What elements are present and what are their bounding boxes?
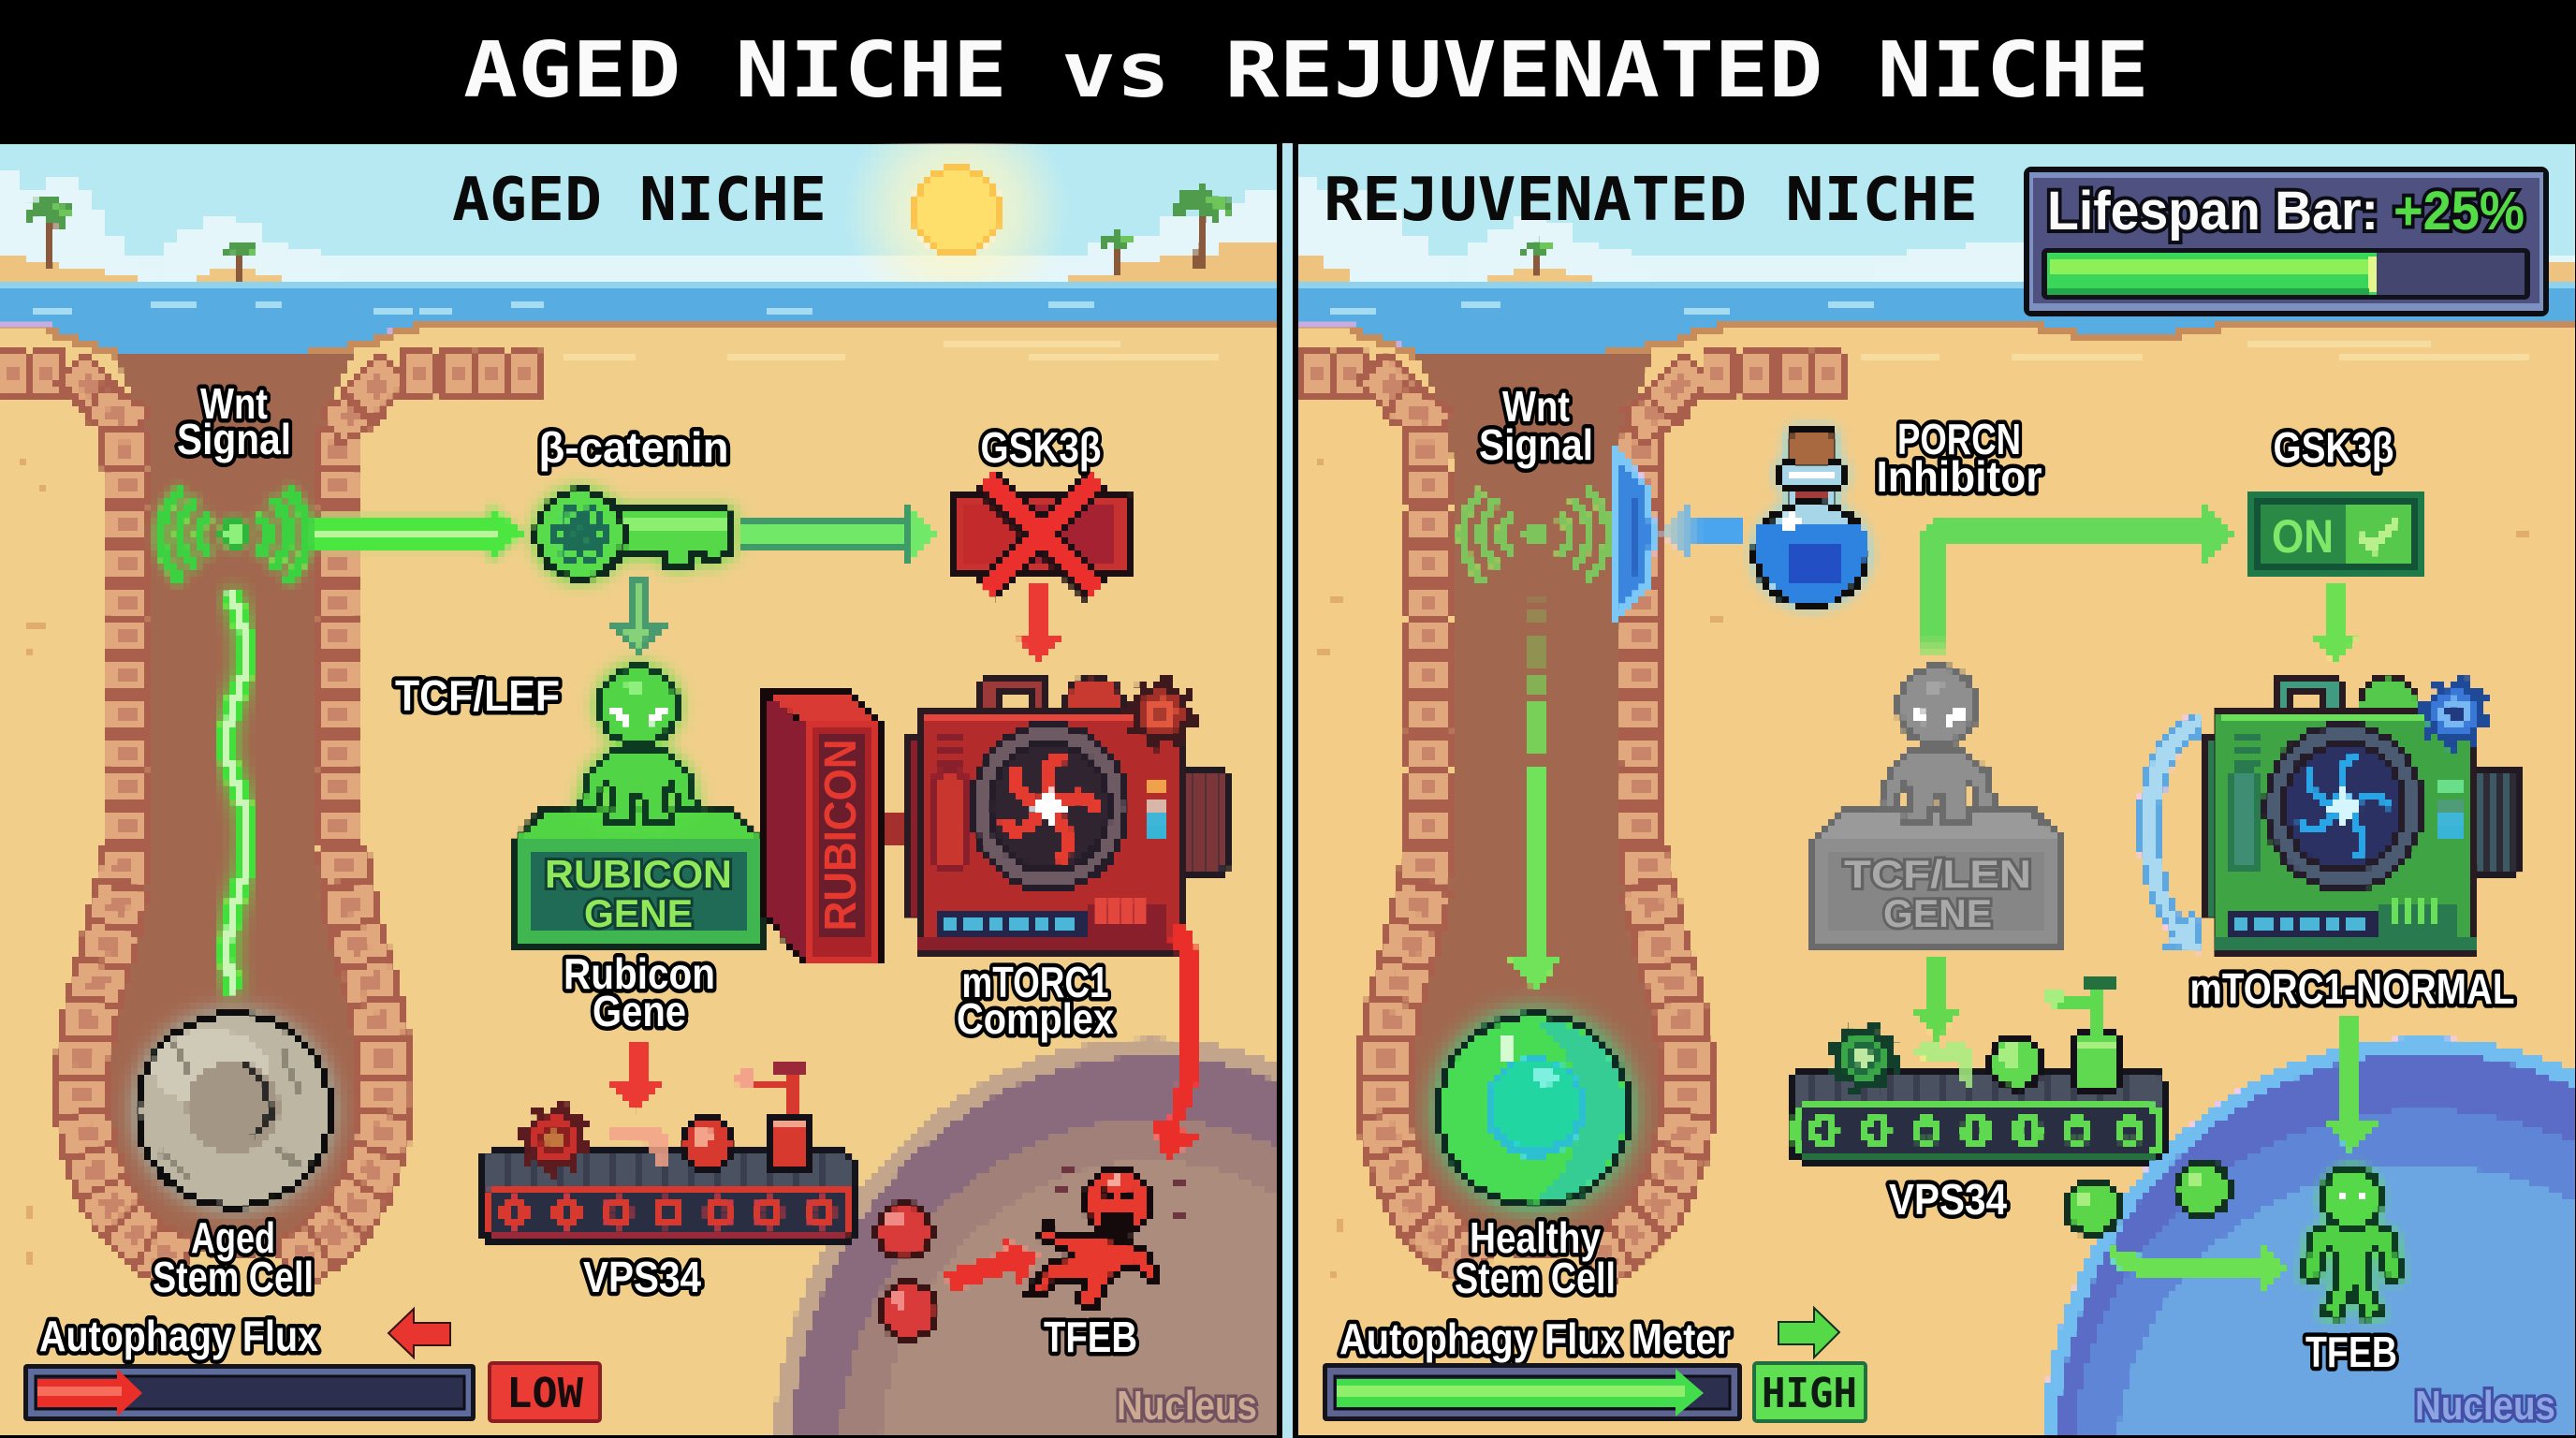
icon: red autophagy vesicles bbox=[877, 1204, 937, 1339]
arrow: mTORC1 to nucleus bbox=[1149, 922, 1201, 1161]
label: PORCN Inhibitor: PORCN bbox=[1897, 415, 2021, 463]
shape: healthy nucleus bbox=[2042, 1037, 2576, 1438]
panel: lifespan bar: +25% bbox=[2393, 181, 2525, 242]
label: Nucleus: Nucleus bbox=[2415, 1383, 2555, 1429]
icon: TCF/LEF figure bbox=[580, 667, 696, 824]
icon: aged stem cell bbox=[138, 1014, 330, 1207]
meter: autophagy flux high bbox=[1323, 1363, 1742, 1421]
icon: blue barrier bbox=[1617, 453, 1653, 616]
sun bbox=[911, 165, 1003, 257]
label: mTORC1 Complex: mTORC1 bbox=[962, 958, 1108, 1006]
arrow: Wnt to beta-catenin bbox=[314, 504, 522, 563]
arrow: GSK3B to mTORC1 bbox=[1015, 585, 1067, 663]
label: VPS34: VPS34 bbox=[1889, 1175, 2007, 1224]
label: beta-catenin: β-catenin bbox=[539, 423, 728, 472]
label: Rubicon Gene: Rubicon bbox=[564, 949, 715, 998]
intestinal crypt wall bbox=[0, 348, 544, 1294]
divider bbox=[1277, 143, 1298, 1438]
label: TFEB: TFEB bbox=[2305, 1328, 2397, 1376]
arrow: mTORC1 to TFEB bbox=[2325, 1015, 2378, 1153]
icon: Wnt signal waves bbox=[160, 489, 308, 582]
label: PORCN Inhibitor: Inhibitor bbox=[1876, 452, 2042, 501]
label: TFEB: TFEB bbox=[1044, 1313, 1137, 1361]
pixel art scene: aged bbox=[0, 98, 1277, 1438]
icon: VPS34 conveyor active bbox=[1786, 977, 2167, 1164]
label: Autophagy Flux: Autophagy Flux bbox=[39, 1312, 318, 1360]
arrow: blue feedback loop bbox=[2140, 713, 2202, 951]
icon: green autophagy vesicles bbox=[2066, 1162, 2230, 1235]
mark: distress sparks bbox=[1053, 1166, 1187, 1216]
label: mTORC1 Complex bbox=[957, 958, 1114, 1043]
icon: distressed TFEB figure bbox=[1025, 1169, 1159, 1306]
icon: inhibited GSK3B bbox=[951, 479, 1131, 592]
icon: faded Wnt signal waves bbox=[1462, 489, 1608, 582]
arrow: GSK3B to mTORC1 normal bbox=[2307, 585, 2360, 663]
label: GSK3B: GSK3β bbox=[981, 423, 1101, 472]
icon: inactive TCF figure bbox=[1880, 667, 1996, 824]
icon: mTORC1 machine bbox=[910, 676, 1226, 953]
pixel art scene: rejuvenated bbox=[1295, 143, 2576, 1438]
label: ON: ON bbox=[2272, 510, 2334, 563]
label: Wnt Signal: Wnt bbox=[200, 379, 268, 428]
arrow: Rubicon gene to VPS34 bbox=[610, 1041, 665, 1112]
arrow: PORCN inhibitor blocks Wnt bbox=[1660, 504, 1745, 562]
shape: aged nucleus bbox=[773, 1038, 1277, 1438]
arrow: autophagy decreasing bbox=[388, 1309, 450, 1357]
label: Wnt Signal: Signal bbox=[177, 415, 291, 463]
sand bbox=[1298, 323, 2576, 1438]
islands and palm tree bbox=[1298, 238, 2576, 285]
squiggle: weakened signal down to stem cell bbox=[227, 592, 247, 992]
arrow: beta-catenin to TCF/LEF bbox=[614, 580, 663, 651]
intestinal crypt wall bbox=[1295, 348, 1846, 1294]
label: Wnt Signal bbox=[177, 379, 291, 463]
icon: inactive gene block bbox=[1810, 807, 2064, 947]
label: Healthy Stem Cell: Stem Cell bbox=[1455, 1254, 1616, 1302]
label: GSK3B: GSK3β bbox=[2273, 423, 2394, 472]
label: Wnt Signal: Signal bbox=[1479, 420, 1593, 469]
panel: rejuvenated niche bbox=[1295, 143, 2576, 1438]
sea bbox=[1298, 285, 2576, 369]
sand bbox=[0, 323, 1277, 1438]
arrow: TCF to GSK3B bbox=[1923, 504, 2233, 658]
label: mTORC1-NORMAL: mTORC1-NORMAL bbox=[2190, 964, 2514, 1013]
arrow: TFEB translocation bbox=[2112, 1243, 2287, 1297]
label: Autophagy Flux Meter: Autophagy Flux Meter bbox=[1339, 1314, 1731, 1363]
label: Wnt Signal: Wnt bbox=[1502, 382, 1570, 431]
icon: mTORC1 normal machine bbox=[2204, 676, 2521, 953]
arrow: beta-catenin to GSK3B bbox=[738, 504, 938, 562]
icon: beta-catenin key bbox=[536, 491, 732, 579]
label: TCF/LEN GENE on block: GENE bbox=[1883, 891, 1992, 935]
label: Healthy Stem Cell: Healthy bbox=[1470, 1213, 1601, 1262]
label: panel heading aged niche: AGED NICHE bbox=[452, 166, 827, 235]
label: Healthy Stem Cell bbox=[1455, 1213, 1616, 1302]
badge: LOW bbox=[490, 1363, 600, 1421]
label: Nucleus: Nucleus bbox=[1117, 1383, 1257, 1429]
meter: autophagy flux low bbox=[23, 1364, 476, 1421]
icon: healthy stem cell bbox=[1439, 1015, 1630, 1206]
toggle: GSK3B on bbox=[2245, 490, 2423, 580]
badge: LOW: LOW bbox=[506, 1370, 584, 1417]
label: panel heading rejuvenated niche: REJUVENATED NICHE bbox=[1324, 166, 1978, 235]
label: PORCN Inhibitor bbox=[1876, 415, 2042, 501]
arrow: restored signal down to stem cell bbox=[1509, 595, 1561, 992]
icon: VPS34 conveyor bbox=[477, 1059, 858, 1245]
islands and palm trees bbox=[0, 183, 1277, 285]
label: Aged Stem Cell: Stem Cell bbox=[153, 1253, 314, 1301]
panel: lifespan bar: Lifespan Bar: bbox=[2047, 181, 2378, 242]
label: TCF/LEN GENE on block: TCF/LEN bbox=[1844, 852, 2031, 896]
panel: lifespan bar bbox=[2024, 167, 2549, 316]
sky bbox=[1298, 143, 2576, 293]
label: RUBICON GENE on block bbox=[545, 852, 732, 935]
title bar bbox=[0, 0, 2576, 143]
label: RUBICON GENE on block: GENE bbox=[584, 891, 693, 935]
title: AGED NICHE vs REJUVENATED NICHE bbox=[463, 26, 2149, 115]
label: VPS34: VPS34 bbox=[583, 1253, 701, 1301]
label: mTORC1 Complex: Complex bbox=[957, 994, 1114, 1043]
sky bbox=[0, 143, 1277, 282]
icon: Rubicon barrier bbox=[761, 686, 914, 964]
arrow: blocked TFEB translocation bbox=[945, 1238, 1041, 1294]
icon: healthy TFEB figure bbox=[2303, 1167, 2402, 1318]
arrow: autophagy increasing bbox=[1778, 1308, 1839, 1357]
label: Rubicon Gene: Gene bbox=[593, 987, 686, 1035]
label: Aged Stem Cell: Aged bbox=[191, 1213, 275, 1262]
label: TCF/LEF: TCF/LEF bbox=[395, 671, 560, 720]
label: TCF/LEN GENE on block bbox=[1844, 852, 2031, 935]
badge: HIGH: HIGH bbox=[1762, 1370, 1857, 1417]
label: RUBICON vertical: RUBICON bbox=[816, 740, 866, 931]
icon: Rubicon gene block bbox=[512, 807, 766, 947]
sea bbox=[0, 282, 1277, 354]
panel: aged niche bbox=[0, 98, 1277, 1438]
icon: PORCN inhibitor flask bbox=[1755, 430, 1867, 606]
label: Wnt Signal bbox=[1479, 382, 1593, 469]
label: RUBICON GENE on block: RUBICON bbox=[545, 852, 732, 896]
label: Rubicon Gene bbox=[564, 949, 715, 1035]
label: Aged Stem Cell bbox=[153, 1213, 314, 1301]
arrow: gene to VPS34 bbox=[1910, 955, 1963, 1040]
